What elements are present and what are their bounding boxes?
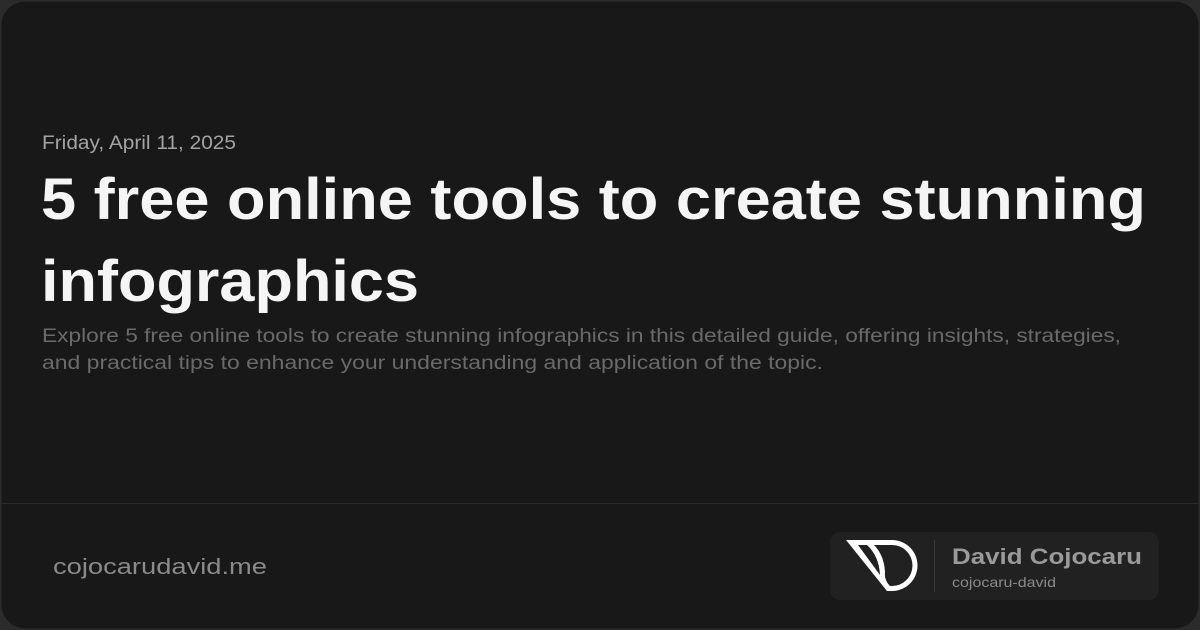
icon: logo [846,540,918,591]
description: Explore 5 free online tools to create stunning infographics in this detailed guide, offering insights, strategies, [42,326,1121,347]
date: Friday, April 11, 2025 [42,133,236,154]
title [41,167,1146,314]
author badge [830,532,1159,600]
description [42,326,1121,374]
author name: David Cojocaru [952,544,1142,569]
description: and practical tips to enhance your understanding and application of the topic. [42,353,823,374]
title: infographics [41,249,419,314]
site url: cojocarudavid.me [53,554,267,579]
author handle: cojocaru-david [952,574,1056,590]
title: 5 free online tools to create stunning [41,167,1146,232]
